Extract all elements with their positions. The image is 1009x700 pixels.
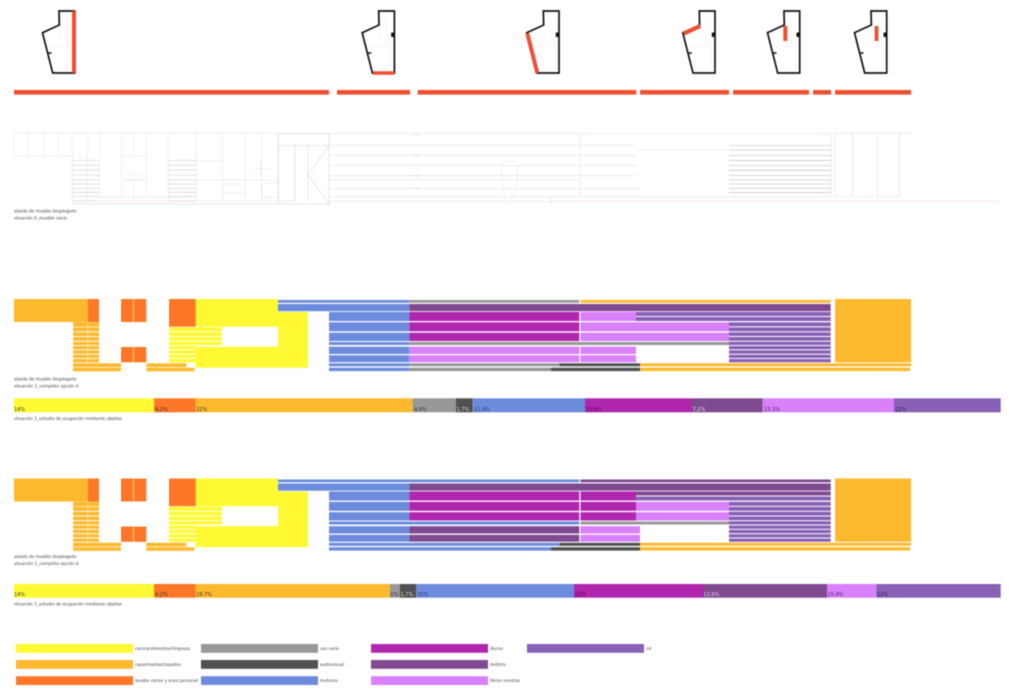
occupation bar: option A: 13,3% [764,407,780,413]
occupation bar: option B: 19,7% [196,592,212,598]
left: clothes, hygiene and kitchen zones [14,478,308,551]
legend item: audiovisual: audiovisual [320,662,344,668]
caption: situation 0 [14,208,77,222]
occupation bar: option B: 13% [575,592,586,598]
legend item: lavabo [16,676,198,685]
legend item: muñecos [201,676,338,685]
occupation bar: option B: 12% [877,592,888,598]
legend item: cocina [16,644,190,653]
legend item: discos: discos [490,646,503,652]
plan diagrams row [42,11,887,73]
legend item: libros revistas [371,676,521,685]
left: clothes, hygiene and kitchen zones [14,299,308,371]
caption: situation 0: situación 0_mueble vacío [14,214,67,222]
caption: situation 0: alzado de mueble desplegado [14,208,77,214]
occupation bar: option A: 4,4% [414,407,427,413]
legend item: lavabo: lavabo varios y aseo personal [135,678,198,684]
legend item: cd [527,644,651,653]
occupation bar: option A: 14% [14,407,25,413]
plan 4: upper-left wall highlighted [683,11,715,73]
centre and right: objects shelving [278,478,911,551]
occupation bar: option A: 4,2% [155,407,168,413]
caption: situation 1 option B: situación 1_completo opción b [14,560,79,567]
plan 6: inner partition highlighted [854,11,887,73]
occupation bar: option B: 12,6% [704,592,720,598]
occupation bar: option B: 4,2% [155,592,168,598]
plan 2: bottom wall highlighted [362,11,394,73]
caption: situation 1 option B: alzado de mueble desplegado [14,554,77,560]
occupation bar: option A [14,398,1001,413]
legend item: uso vario: uso vario [320,646,339,652]
occupation bar: option A: 10,8% [586,407,602,413]
legend item: dvd/vhs: dvd/vhs [490,662,506,668]
legend item: cd: cd [646,646,651,652]
occupation bar: option B: 16% [417,592,428,598]
legend item: ropa: ropa/mantas/zapatos [135,662,182,668]
caption: occupation study A: situación 1_estudio de ocupación mediante objetos [14,415,122,422]
occupation bar: option A: 7,2% [692,407,705,413]
elevation: situation 0, empty furniture [14,133,999,204]
occupation bar: option B: 14% [14,592,25,598]
caption: occupation study B: situación 1_estudio de ocupación mediante objetos [14,600,122,607]
legend item: muñecos: muñecos [320,678,338,684]
plan 3: lower-left wall highlighted [527,11,559,73]
occupation bar: option A: 1,7% [456,407,469,413]
occupation bar: option B: 15,4% [828,592,844,598]
legend item: cocina: cocina/alimentos/limpieza [135,646,190,652]
legend item: audiovisual [201,660,344,669]
occupation bar: option A: 12% [895,407,906,413]
legend item: discos [371,644,503,653]
occupation bar: option B: 1% [390,592,398,598]
elevation: situation 1, option B [14,478,911,551]
occupation bar: option A: 11,4% [474,407,490,413]
occupation bar: option B: 1,7% [400,592,413,598]
occupation bar: option A: 22% [196,407,207,413]
plan 1: right wall highlighted [42,11,75,73]
legend item: libros revistas: libros revistas [490,678,521,684]
elevation: situation 1, option A [14,299,911,371]
caption: situation 1 option A: situación 1_completo opción A [14,382,79,390]
legend [16,644,651,685]
occupation bar: option B [14,584,1001,598]
legend item: ropa [16,660,182,669]
legend item: uso vario [201,644,339,653]
caption: situation 1 option B [14,554,79,567]
caption: situation 1 option A [14,376,79,390]
caption: situation 1 option A: alzado de mueble desplegado [14,376,77,382]
plan 5: partition highlighted [768,11,800,73]
centre and right: objects shelving [278,299,911,371]
legend item: dvd/vhs [371,660,506,669]
red wall-span bars [14,90,911,95]
